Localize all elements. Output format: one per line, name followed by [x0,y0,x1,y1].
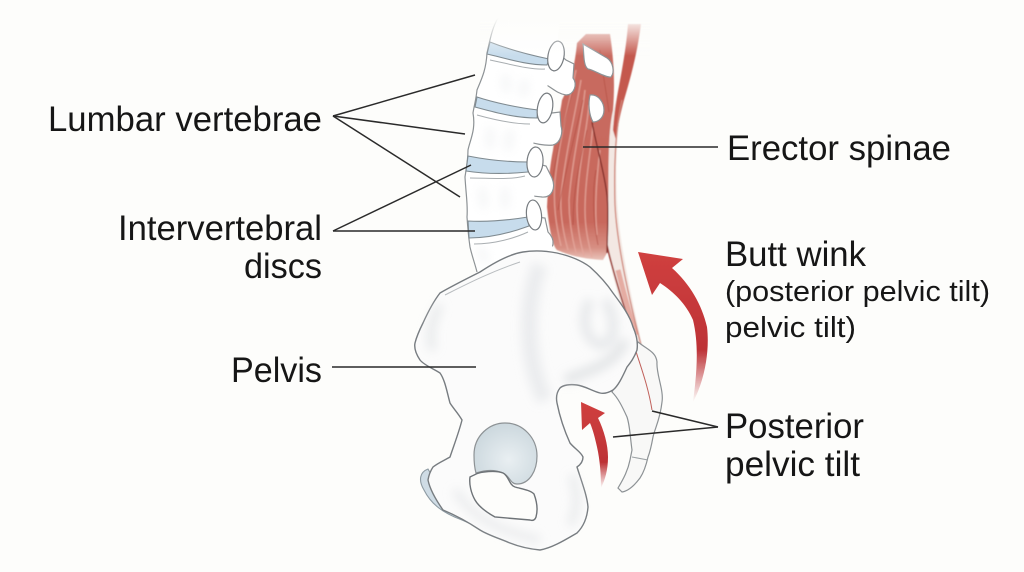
intervertebral discs [487,42,549,65]
label: lumbar vertebrae: Lumbar vertebrae [48,100,322,139]
label: posterior pelvic tilt [725,407,864,484]
lumbar vertebrae [465,14,650,272]
pelvis [415,251,637,550]
sacrum and coccyx [612,342,662,492]
muscle: tendon strap [605,24,642,345]
label: posterior pelvic tilt: Posterior [725,407,864,446]
endplate contours [470,60,545,244]
label: intervertebral discs: Intervertebral [118,209,322,248]
arrow: butt wink rotation [638,252,708,402]
label: pelvis: Pelvis [231,351,322,390]
label: intervertebral discs [118,209,322,286]
label: butt wink: Butt wink [725,235,866,274]
bone shading [431,265,625,540]
acetabulum [474,423,537,484]
label: butt wink: (posterior pelvic tilt) [725,276,990,308]
label: intervertebral discs: discs [244,247,322,286]
leader lines [332,75,718,437]
facet joints [546,40,566,72]
obturator foramen [470,471,537,520]
ischium blue cartilage [421,469,478,527]
transverse processes [540,38,575,95]
erector spinae muscle [547,24,642,345]
label: butt wink: pelvic tilt) [725,312,856,344]
muscle: main belly [547,34,614,260]
label: erector spinae: Erector spinae [727,129,951,168]
vertebral bodies [465,18,560,272]
upper bone fragments [583,44,613,77]
hip bone [415,251,637,550]
label: posterior pelvic tilt: pelvic tilt [725,445,860,484]
label: butt wink [725,235,990,344]
arrow: posterior pelvic tilt [581,402,608,488]
